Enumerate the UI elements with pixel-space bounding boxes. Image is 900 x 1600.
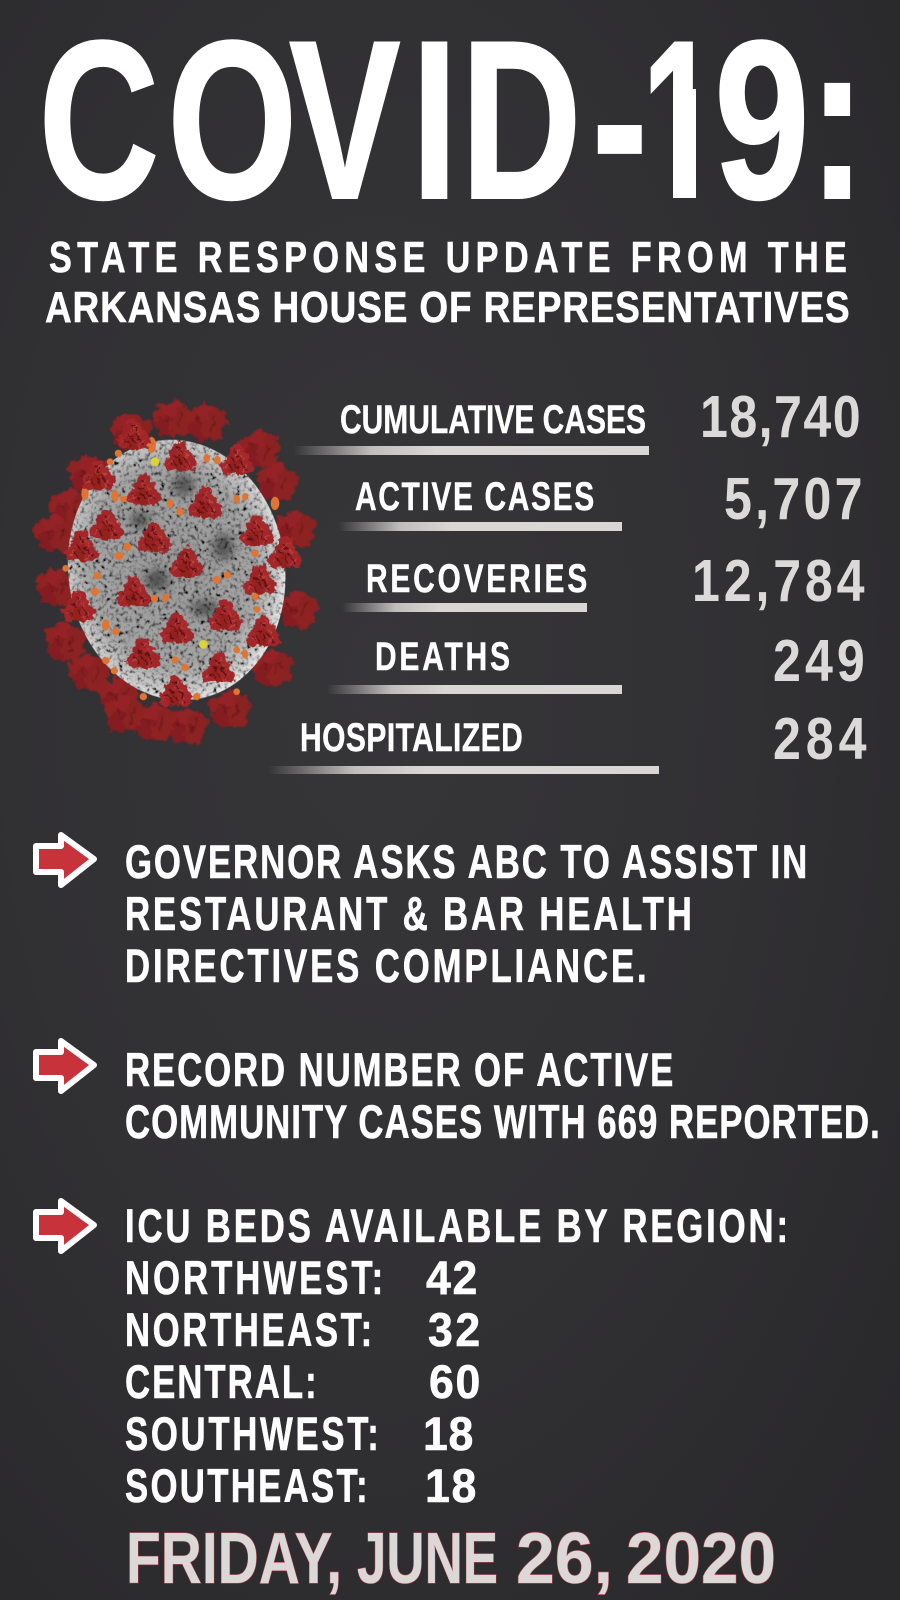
text block: ICU beds: CENTRAL: bbox=[125, 1356, 317, 1408]
stat: deaths: 249 bbox=[773, 627, 865, 694]
stat: recoveries: 12,784 bbox=[692, 547, 865, 614]
date: FRIDAY, bbox=[126, 1519, 342, 1599]
text block: ICU beds bbox=[125, 1200, 788, 1512]
stat: cumulative cases: CUMULATIVE CASES bbox=[340, 398, 646, 442]
stat: active cases: 5,707 bbox=[724, 465, 863, 532]
stat: active cases: ACTIVE CASES bbox=[355, 475, 594, 519]
text block: governor: RESTAURANT & BAR HEALTH bbox=[125, 888, 692, 940]
stat: deaths bbox=[327, 627, 865, 694]
text block: ICU beds: NORTHEAST: bbox=[125, 1304, 372, 1356]
date: 2020 bbox=[626, 1519, 776, 1599]
yellow proteins bbox=[151, 457, 208, 649]
text block: ICU beds: 60 bbox=[429, 1356, 480, 1408]
subtitle: STATE RESPONSE UPDATE FROM THE bbox=[49, 233, 847, 282]
virus illustration bbox=[34, 400, 318, 744]
icon: arrow 1 bbox=[36, 835, 94, 885]
title: COVID- bbox=[38, 0, 648, 247]
text block: governor: DIRECTIVES COMPLIANCE. bbox=[125, 940, 647, 992]
stat: active cases bbox=[338, 465, 863, 532]
icon: arrow 2 bbox=[36, 1041, 94, 1091]
text block: ICU beds: 18 bbox=[423, 1408, 473, 1460]
text block: ICU beds: ICU BEDS AVAILABLE BY REGION: bbox=[125, 1200, 788, 1252]
date: JUNE bbox=[357, 1519, 498, 1599]
text block: record number: COMMUNITY CASES WITH 669 REPORTED. bbox=[125, 1096, 880, 1148]
date: 26, bbox=[516, 1519, 613, 1599]
stat: cumulative cases: 18,740 bbox=[700, 383, 861, 450]
stat: hospitalized bbox=[268, 705, 867, 774]
text block: record number: RECORD NUMBER OF ACTIVE bbox=[125, 1044, 673, 1096]
text block: ICU beds: 18 bbox=[425, 1460, 476, 1512]
stat: deaths: DEATHS bbox=[375, 635, 510, 679]
title: 1 bbox=[642, 0, 717, 247]
title bbox=[44, 39, 850, 202]
text block: ICU beds: 42 bbox=[426, 1252, 477, 1304]
title: 9: bbox=[714, 0, 866, 246]
stat: recoveries bbox=[342, 547, 865, 614]
rim spikes bbox=[34, 400, 318, 744]
subtitle: ARKANSAS HOUSE OF REPRESENTATIVES bbox=[45, 282, 850, 332]
date bbox=[126, 1519, 776, 1599]
text block: ICU beds: 32 bbox=[428, 1304, 480, 1356]
shadow patches on body bbox=[130, 475, 233, 616]
subtitle bbox=[45, 233, 850, 332]
text block: record number bbox=[125, 1044, 880, 1148]
text block: governor: GOVERNOR ASKS ABC TO ASSIST IN bbox=[125, 836, 807, 888]
stat: hospitalized: HOSPITALIZED bbox=[300, 716, 523, 760]
front spikes bbox=[62, 419, 302, 707]
text block: governor bbox=[125, 836, 807, 992]
stat: recoveries: RECOVERIES bbox=[366, 557, 587, 601]
stat: hospitalized: 284 bbox=[773, 705, 867, 772]
virus body bbox=[51, 426, 302, 714]
icon: arrow 3 bbox=[36, 1201, 94, 1251]
orange proteins bbox=[62, 437, 279, 700]
text block: ICU beds: SOUTHWEST: bbox=[125, 1408, 379, 1460]
text block: ICU beds: SOUTHEAST: bbox=[125, 1460, 368, 1512]
stat: cumulative cases bbox=[293, 383, 861, 455]
text block: ICU beds: NORTHWEST: bbox=[125, 1252, 383, 1304]
